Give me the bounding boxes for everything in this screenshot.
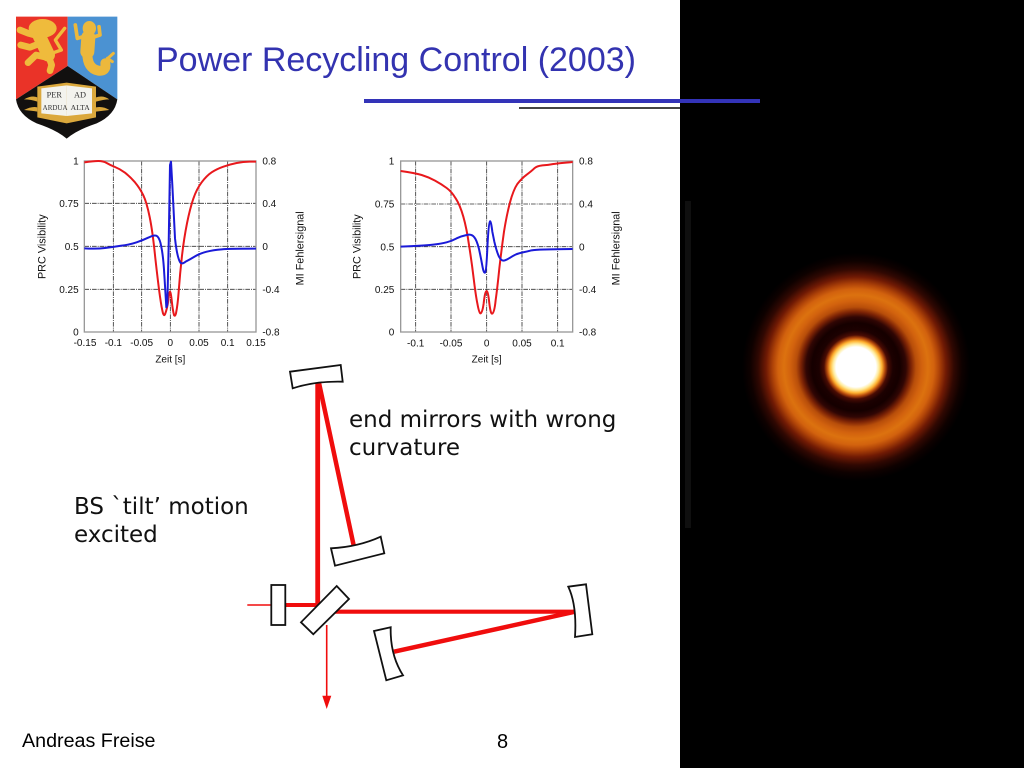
mirror: top end mirror [290, 365, 343, 388]
chart: left PRC visibility plot: 0 [73, 328, 79, 339]
chart: right PRC visibility plot: MI Fehlersignal [611, 211, 623, 285]
text: end mirrors label [349, 407, 616, 460]
title: Power Recycling Control (2003) [156, 41, 636, 79]
chart: right PRC visibility plot: Zeit [s] [472, 354, 502, 365]
mermaid [75, 21, 113, 71]
lion [20, 19, 65, 71]
chart: right PRC visibility plot: 0 [484, 339, 490, 350]
icon: university coat of arms: ALTA [71, 103, 90, 112]
chart: left PRC visibility plot: -0.15 [74, 338, 97, 349]
chart: right PRC visibility plot: -0.05 [440, 339, 463, 350]
chart: left PRC visibility plot: 0.15 [246, 338, 266, 349]
chart: left PRC visibility plot: Zeit [s] [155, 354, 186, 365]
text: BS tilt label: excited [74, 522, 158, 548]
chart: right PRC visibility plot: -0.8 [579, 328, 597, 339]
chart: left PRC visibility plot: 0 [262, 242, 268, 253]
panel: black side panel [680, 0, 1024, 768]
chart: left PRC visibility plot: -0.05 [130, 338, 153, 349]
chart: right PRC visibility plot: 0.25 [375, 285, 395, 296]
chart: left PRC visibility plot [36, 156, 307, 365]
beam splitter [301, 586, 349, 634]
icon: faint vertical strip text on black panel [685, 201, 691, 528]
chart: left PRC visibility plot: 0.05 [189, 338, 209, 349]
icon: university coat of arms: PER [47, 91, 62, 100]
chart: right PRC visibility plot: 0.05 [512, 339, 532, 350]
chart: left PRC visibility plot: 0.25 [59, 285, 79, 296]
laser beams [247, 382, 575, 697]
chart: left PRC visibility plot: MI Fehlersignal [295, 211, 307, 285]
title underline: black [519, 107, 680, 109]
mirror: folded top mirror [331, 537, 384, 566]
chart: left PRC visibility plot: 0.4 [262, 199, 277, 210]
chart: left PRC visibility plot: 0 [168, 338, 174, 349]
chart: left PRC visibility plot: 0.1 [221, 338, 235, 349]
chart: right PRC visibility plot: 0.4 [579, 200, 593, 211]
chart: left PRC visibility plot: -0.8 [262, 328, 280, 339]
chart: left PRC visibility plot: PRC Visibility [36, 214, 48, 279]
chart: left PRC visibility plot: 0.75 [59, 199, 79, 210]
mirror: lower folded mirror [374, 627, 403, 680]
chart: right PRC visibility plot: 0 [389, 328, 395, 339]
chart: right PRC visibility plot: -0.4 [579, 285, 597, 296]
icon: university coat of arms: ARDUA [43, 104, 68, 112]
mirror: power recycling mirror [271, 585, 285, 625]
chart: right PRC visibility plot: 0 [579, 242, 585, 253]
chart: right PRC visibility plot: 1 [389, 157, 395, 168]
footer: author: Andreas Freise [22, 730, 156, 752]
beam profile: bright core with ring [736, 247, 976, 487]
footer: page number: 8 [497, 731, 508, 753]
chart: right PRC visibility plot: 0.5 [380, 242, 395, 253]
chart: left PRC visibility plot: 0.5 [65, 242, 79, 253]
chart: left PRC visibility plot: -0.4 [262, 285, 280, 296]
chart: left PRC visibility plot: -0.1 [105, 338, 122, 349]
chart: left PRC visibility plot: 0.8 [262, 156, 277, 167]
text: BS tilt label: BS `tilt’ motion [74, 494, 249, 520]
chart: right PRC visibility plot: 0.75 [375, 200, 395, 211]
chart: right PRC visibility plot: 0.1 [551, 339, 565, 350]
chart: right PRC visibility plot: 0.8 [579, 157, 593, 168]
text: end mirrors label: end mirrors with wrong [349, 407, 616, 433]
mirror: right end mirror [568, 584, 592, 637]
icon: university coat of arms: AD [74, 91, 86, 100]
chart: right PRC visibility plot: -0.1 [407, 339, 425, 350]
chart: left PRC visibility plot: 1 [73, 156, 79, 167]
arrow: output beam [322, 696, 331, 709]
text: BS tilt label [74, 494, 249, 548]
text: end mirrors label: curvature [349, 434, 460, 460]
title underline: blue [364, 99, 760, 103]
icon: university coat of arms [16, 16, 118, 139]
chart: right PRC visibility plot: PRC Visibility [352, 214, 364, 279]
chart: right PRC visibility plot [352, 157, 623, 365]
